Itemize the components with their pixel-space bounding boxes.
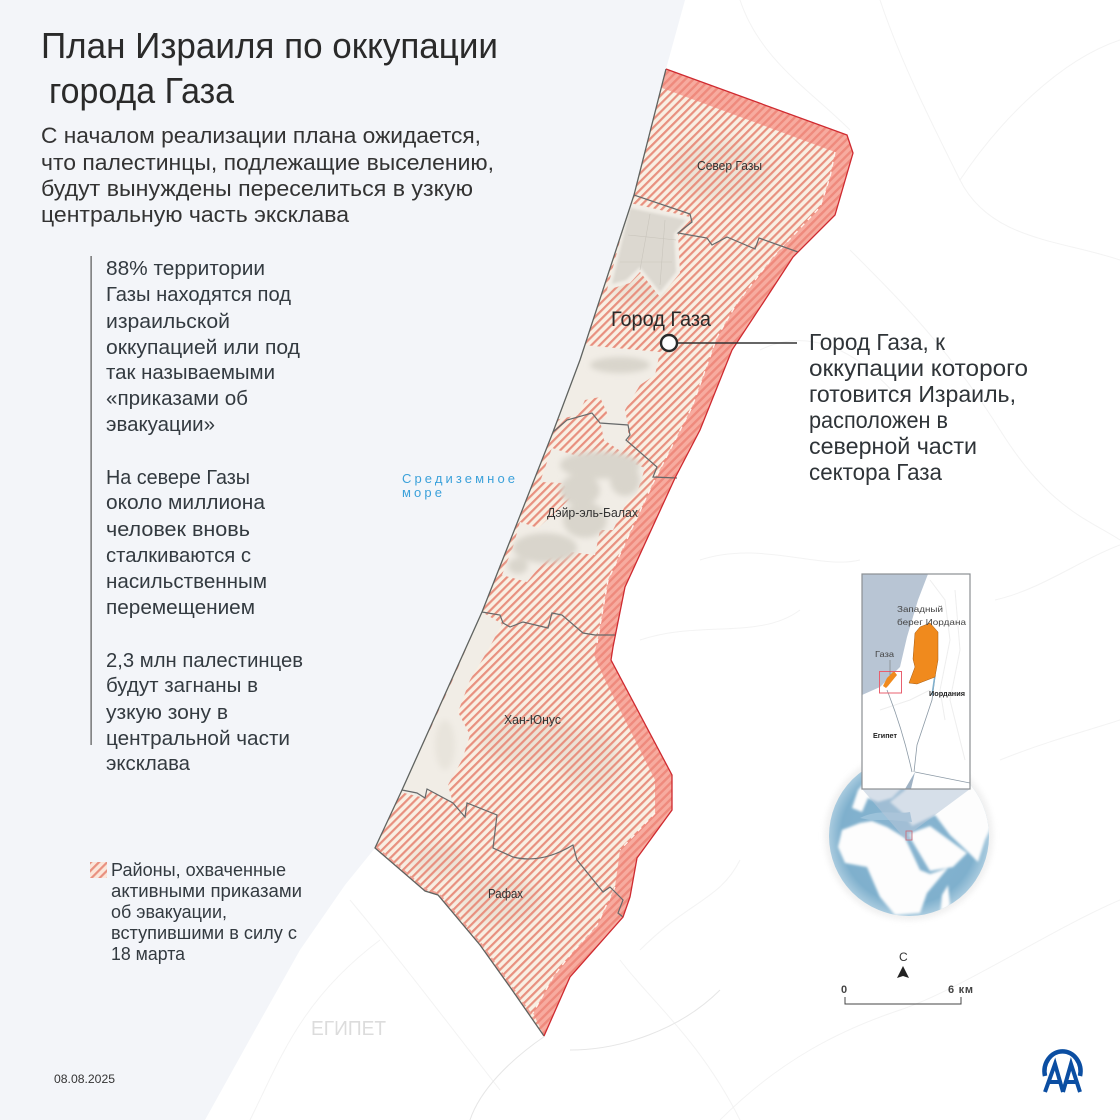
governorate boundaries: [402, 195, 798, 917]
side text block: около миллиона: [106, 492, 266, 514]
inset locator map: Египет: [873, 733, 898, 740]
side text block: израильской: [106, 311, 230, 333]
faint roads on land: [250, 0, 1120, 1120]
inset locator map: берег Иордана: [897, 617, 966, 627]
callout: Gaza City: Город Газа, к: [809, 329, 946, 355]
side text block: насильственным: [106, 571, 267, 593]
side text block: центральной части: [106, 728, 290, 750]
logo: AA: [1044, 1051, 1080, 1092]
inset locator map: Иордания: [929, 691, 965, 698]
inset locator map: Западный: [897, 604, 943, 614]
label: Mediterranean Sea: [402, 471, 515, 500]
buffer zone: [533, 69, 853, 1036]
title: [41, 25, 498, 111]
sea: [0, 0, 685, 1120]
land masses: [836, 784, 989, 916]
map labels: Хан-Юнус: [504, 712, 561, 727]
subtitle: С началом реализации плана ожидается,: [41, 123, 481, 148]
side text block: эвакуации»: [106, 414, 215, 436]
side text block: перемещением: [106, 597, 255, 619]
non-evacuated urban patches: [400, 203, 690, 803]
title: города Газа: [49, 70, 235, 111]
strip outline: [375, 69, 666, 1036]
callout: Gaza City: северной части: [809, 433, 977, 459]
legend: активными приказами: [111, 881, 302, 901]
side text block: На севере Газы: [106, 467, 250, 489]
side text block: человек вновь: [106, 519, 250, 541]
inset locator map: Газа: [875, 649, 894, 659]
side text block: будут загнаны в: [106, 675, 258, 697]
label: Mediterranean Sea: Средиземное: [402, 471, 515, 486]
south edge hatch tint: [375, 848, 533, 1020]
Gaza highlight: [883, 671, 897, 688]
side text block: Газы находятся под: [106, 284, 291, 306]
map: Gaza Strip: [370, 60, 860, 1040]
callout: Gaza City: сектора Газа: [809, 459, 942, 485]
inner dashed edge of buffer: [533, 152, 835, 1013]
legend: [90, 860, 302, 964]
globe locator: [825, 768, 993, 920]
area base: [377, 88, 834, 1032]
side text block: так называемыми: [106, 362, 275, 384]
projection cone: [862, 789, 970, 840]
callout: Gaza City: расположен в: [809, 407, 948, 433]
subtitle: что палестинцы, подлежащие выселению,: [41, 150, 494, 175]
legend: Районы, охваченные: [111, 860, 286, 880]
callout: Gaza City: оккупации которого: [809, 355, 1028, 381]
label: Egypt: ЕГИПЕТ: [311, 1018, 386, 1040]
side text block: узкую зону в: [106, 702, 228, 724]
legend: 18 марта: [111, 944, 186, 964]
subtitle: центральную часть эксклава: [41, 202, 350, 227]
map labels: Рафах: [488, 886, 523, 901]
urban blotches below hatch: [410, 140, 770, 925]
subtitle: будут вынуждены переселиться в узкую: [41, 176, 473, 201]
side text block: 88% территории: [106, 258, 265, 280]
subtitle: [41, 123, 494, 227]
scale bar: 0: [841, 984, 847, 996]
side text block: [90, 256, 303, 775]
side text block: эксклава: [106, 753, 191, 775]
label: Mediterranean Sea: море: [402, 485, 442, 500]
legend: вступившими в силу с: [111, 923, 297, 943]
callout: Gaza City: готовится Израиль,: [809, 381, 1016, 407]
label: Gaza City with marker: Город Газа: [611, 308, 711, 331]
legend: об эвакуации,: [111, 902, 227, 922]
side text block: оккупацией или под: [106, 337, 300, 359]
title: План Израиля по оккупации: [41, 25, 498, 66]
urban grey texture: [612, 208, 686, 292]
callout: Gaza City: [809, 329, 1028, 485]
hatched evacuation area: [370, 60, 860, 1040]
map labels: Дэйр-эль-Балах: [547, 505, 638, 520]
scale bar: 6 км: [948, 984, 973, 996]
label: Gaza City with marker: [611, 308, 797, 351]
scale bar: [841, 984, 973, 1004]
side text block: «приказами об: [106, 388, 248, 410]
north arrow: [897, 950, 909, 978]
date: 08.08.2025: [54, 1074, 115, 1086]
map labels: Север Газы: [697, 158, 762, 173]
map labels: [488, 158, 762, 901]
inset locator map: [862, 574, 970, 789]
side text block: 2,3 млн палестинцев: [106, 650, 303, 672]
side text block: сталкиваются с: [106, 545, 251, 567]
north arrow: С: [899, 950, 908, 964]
West Bank: [909, 623, 938, 684]
